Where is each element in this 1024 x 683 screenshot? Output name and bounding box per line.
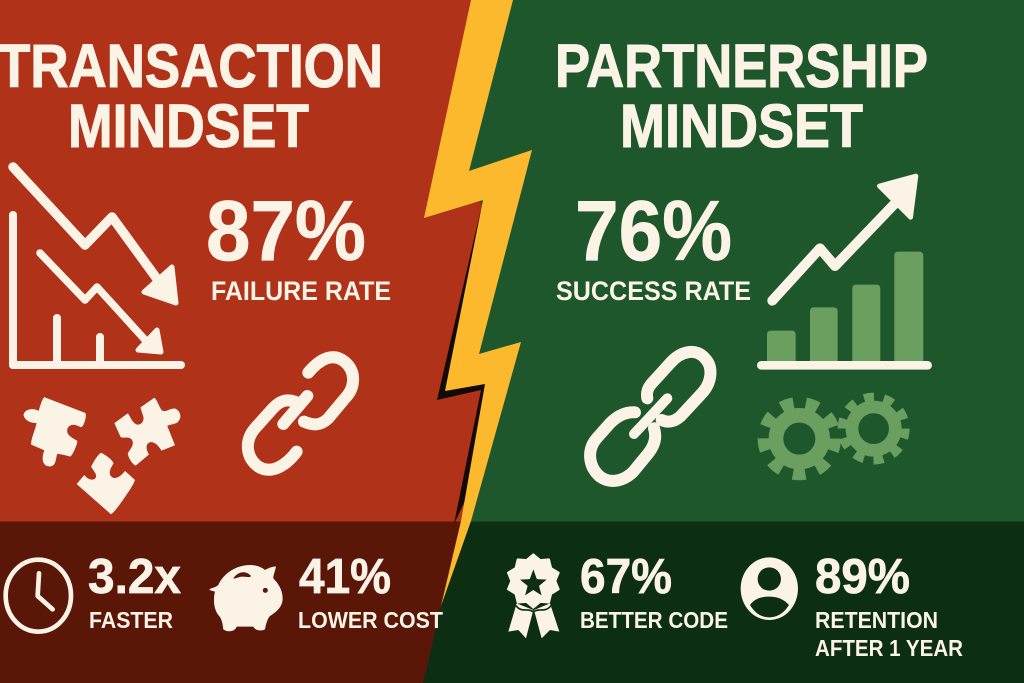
stat: 76 percent success rate: [556, 184, 751, 306]
stat: 89 percent retention after 1 year: RETENTION: [815, 607, 938, 633]
icon: gears: [763, 397, 905, 475]
panel: partnership stats band: [423, 522, 1024, 683]
stat: 3.2x faster: [6, 550, 181, 633]
stat: 87 percent failure rate: FAILURE RATE: [211, 276, 391, 306]
lightning bolt divider: [424, 0, 532, 606]
title: transaction mindset: TRANSACTION: [0, 32, 383, 100]
icon: scattered puzzle pieces: [24, 398, 180, 514]
icon: declining chart: [13, 167, 181, 365]
icon: award ribbon: [508, 554, 559, 638]
title: partnership mindset: [555, 32, 928, 160]
title: partnership mindset: PARTNERSHIP: [555, 32, 928, 100]
icon: clock: [6, 560, 71, 632]
stat: 41 percent lower cost: [209, 550, 443, 633]
stat: 3.2x faster: 3.2x: [88, 550, 181, 604]
stat: 89 percent retention after 1 year: [741, 550, 963, 661]
stat: 3.2x faster: FASTER: [89, 607, 173, 633]
stat: 87 percent failure rate: 87%: [206, 184, 366, 279]
title: partnership mindset: MINDSET: [620, 92, 863, 160]
title: transaction mindset: MINDSET: [68, 92, 309, 160]
stat: 67 percent better code: 67%: [580, 550, 672, 604]
stat: 67 percent better code: BETTER CODE: [580, 607, 728, 633]
stat: 76 percent success rate: 76%: [575, 184, 732, 279]
stat: 89 percent retention after 1 year: AFTER 1 YEAR: [815, 635, 963, 661]
icon: piggy bank: [209, 565, 283, 631]
stat: 41 percent lower cost: 41%: [299, 550, 391, 604]
icon: broken link: [248, 357, 353, 470]
icon: rising chart: [761, 176, 928, 365]
icon: person avatar: [741, 557, 798, 620]
icon: intact chain link: [590, 352, 710, 481]
chart bars: [767, 252, 923, 362]
title: transaction mindset: [0, 32, 383, 160]
panel: partnership background: [423, 0, 1024, 683]
stat: 76 percent success rate: SUCCESS RATE: [556, 276, 751, 306]
stat: 89 percent retention after 1 year: 89%: [815, 550, 910, 604]
panel: transaction stats band: [0, 522, 470, 683]
stat: 41 percent lower cost: LOWER COST: [298, 607, 443, 633]
stat: 67 percent better code: [508, 550, 728, 638]
